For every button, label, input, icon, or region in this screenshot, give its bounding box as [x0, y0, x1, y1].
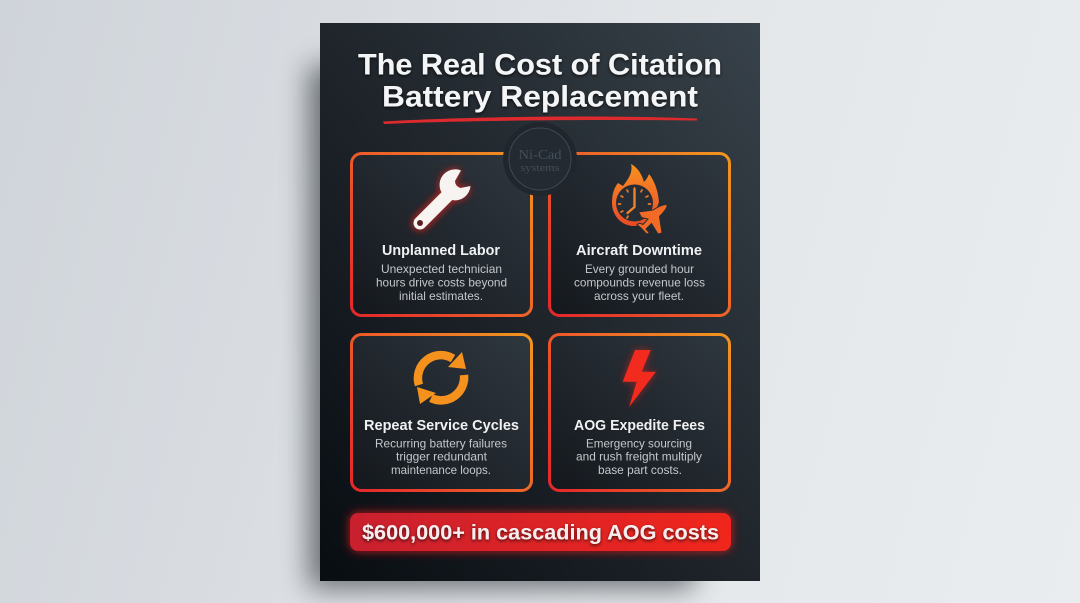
title underline: [383, 117, 697, 124]
body text: and rush freight multiply: [576, 450, 702, 464]
logo badge: Ni-Cad: [518, 147, 562, 162]
body text: Emergency sourcing: [586, 436, 692, 450]
title: The Real Cost of Citation: [358, 48, 722, 82]
body text: Recurring battery failures: [375, 436, 507, 450]
body text: [376, 262, 507, 303]
panel: aircraft downtime: [550, 154, 730, 316]
logo badge: [503, 122, 577, 196]
icon: lightning bolt: [623, 350, 656, 407]
body text: base part costs.: [598, 463, 682, 477]
logo badge: systems: [520, 163, 560, 174]
callout banner: $600,000+ in cascading AOG costs: [362, 522, 719, 544]
heading: Repeat Service Cycles: [364, 417, 519, 434]
heading: Unplanned Labor: [382, 242, 500, 259]
panel: aog expedite fees: [550, 334, 730, 490]
poster shadow: [309, 66, 694, 588]
body text: compounds revenue loss: [574, 276, 705, 290]
poster panel: [320, 23, 760, 581]
body text: maintenance loops.: [391, 463, 491, 477]
body text: [375, 436, 507, 477]
body text: Every grounded hour: [585, 262, 694, 276]
body text: Unexpected technician: [381, 262, 502, 276]
heading: AOG Expedite Fees: [574, 417, 705, 434]
title: Battery Replacement: [382, 80, 698, 114]
body text: hours drive costs beyond: [376, 276, 507, 290]
heading: Aircraft Downtime: [576, 242, 702, 259]
body text: [576, 436, 702, 477]
body text: across your fleet.: [594, 289, 684, 303]
icon: cycle arrows: [417, 352, 466, 404]
icon: burning clock and plane: [612, 164, 667, 234]
body text: initial estimates.: [399, 289, 483, 303]
icon: wrench: [417, 169, 470, 226]
body text: [574, 262, 705, 303]
panel: unplanned labor: [352, 154, 532, 316]
body text: trigger redundant: [396, 450, 488, 464]
callout banner: [350, 513, 731, 551]
title: [358, 48, 722, 114]
panel: repeat service cycles: [352, 334, 532, 490]
